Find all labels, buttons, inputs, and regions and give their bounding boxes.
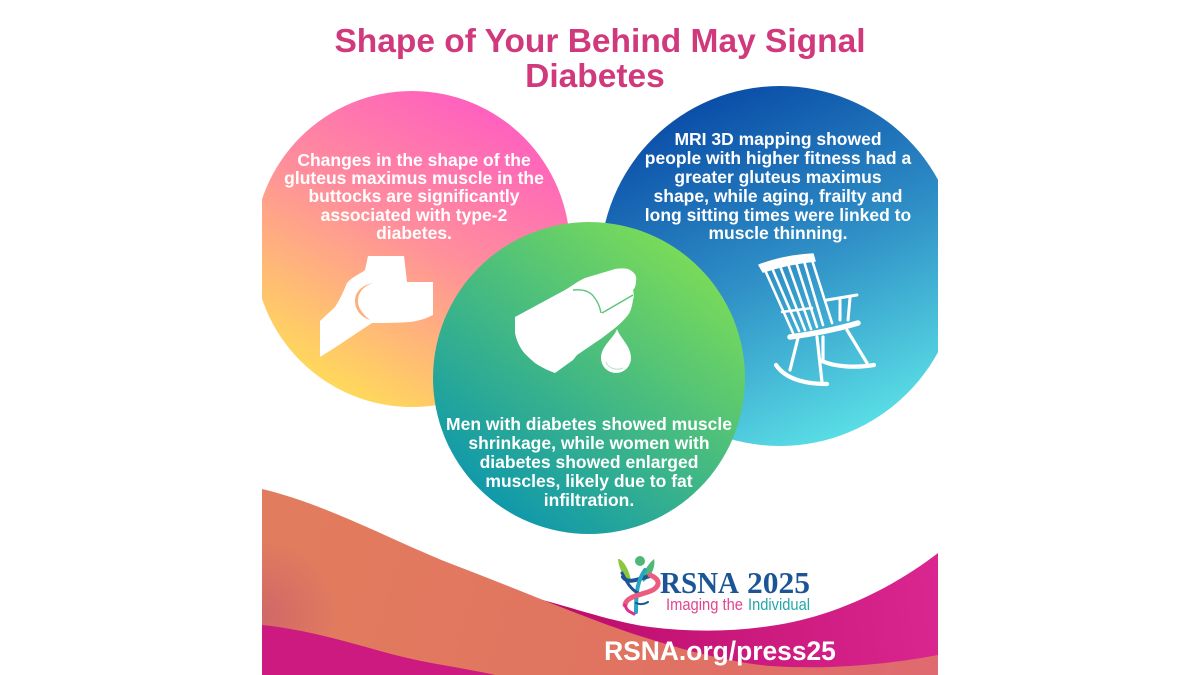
text: blue circle: long sitting times were linked to	[645, 205, 911, 225]
logo wordmark: RSNA	[660, 565, 740, 600]
text: pink circle: buttocks are significantly	[308, 186, 520, 206]
icon: rocking chair	[759, 254, 874, 384]
circle: green	[433, 222, 745, 534]
text: green circle: muscles, likely due to fat	[485, 471, 693, 491]
text: green circle: shrinkage, while women with	[468, 433, 710, 453]
text: pink circle: Changes in the shape of the	[297, 150, 531, 170]
logo: RSNA 2025	[618, 556, 810, 614]
text: pink circle: gluteus maximus muscle in the	[284, 168, 544, 188]
url: RSNA.org/press25	[604, 636, 836, 666]
wave: magenta left	[262, 625, 495, 675]
wave: magenta right	[542, 553, 938, 668]
title: Diabetes	[525, 58, 665, 95]
text: blue circle: greater gluteus maximus	[674, 167, 882, 187]
text: green circle: diabetes showed enlarged	[480, 452, 698, 472]
circle: pink	[254, 91, 570, 407]
text: pink circle: associated with type-2	[321, 205, 508, 225]
circle: blue	[600, 86, 960, 446]
text: green circle: Men with diabetes showed muscle	[446, 414, 732, 434]
title: Shape of Your Behind May Signal	[334, 23, 866, 60]
logo year: 2025	[747, 565, 810, 600]
text: blue circle: MRI 3D mapping showed	[674, 129, 882, 149]
text: blue circle: shape, while aging, frailty and	[654, 186, 902, 206]
text: blue circle: muscle thinning.	[708, 223, 848, 243]
text: blue circle: people with higher fitness had a	[645, 148, 911, 168]
text: pink circle: diabetes.	[376, 223, 452, 243]
text: green circle: infiltration.	[544, 490, 634, 510]
logo figure	[618, 556, 658, 614]
logo tagline teal: Individual	[748, 596, 810, 614]
logo tagline pink: Imaging the	[666, 596, 743, 614]
icon: muscle with drop	[515, 268, 636, 373]
icon: gluteus figure	[320, 256, 433, 357]
wave: orange	[262, 489, 938, 675]
wave: orange shade	[262, 569, 306, 631]
